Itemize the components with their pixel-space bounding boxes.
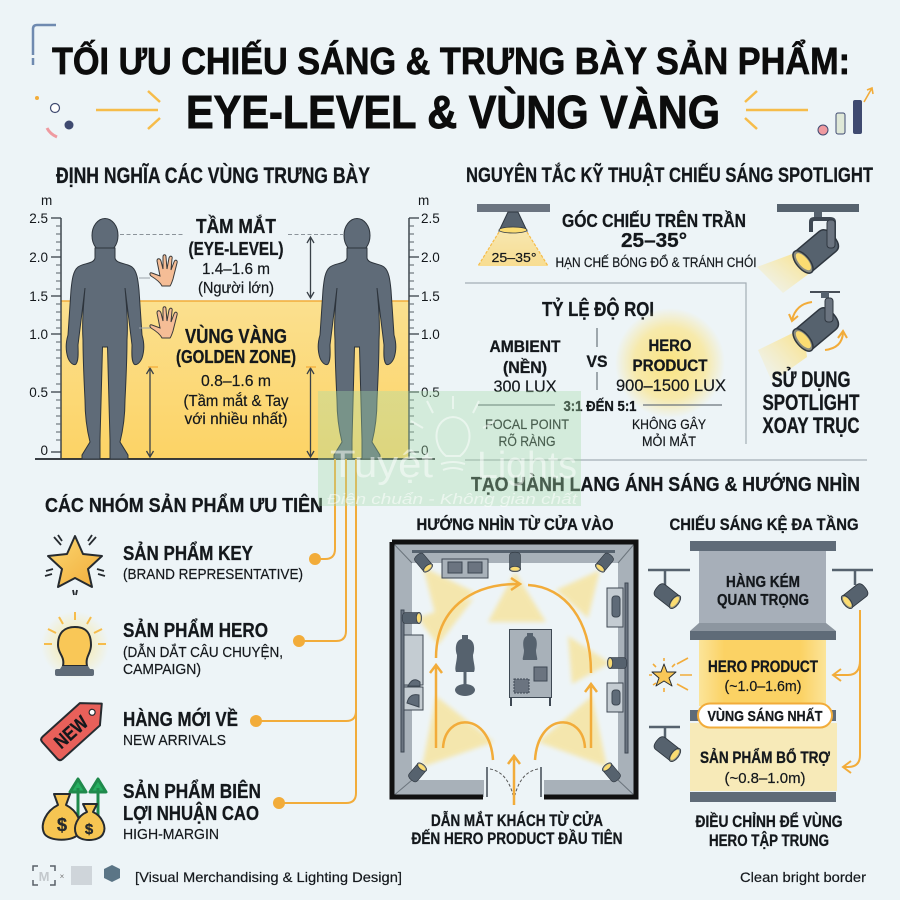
text: hero product: SẢN PHẨM HERO — [123, 619, 268, 642]
icon: shelf spotlight lower left — [649, 727, 683, 763]
text: rotating spotlight — [762, 367, 860, 438]
hero column: PRODUCT — [632, 356, 708, 375]
icon: track spotlight — [757, 204, 859, 293]
diagram: multi-tier shelf — [648, 541, 873, 802]
text: hero product — [123, 619, 283, 678]
eye-level guides — [120, 234, 343, 236]
footer logos — [33, 865, 120, 885]
diagram: store floor plan — [392, 542, 636, 805]
label: golden zone: 0.8–1.6 m — [201, 373, 271, 390]
text: hero product: (DẪN DẮT CÂU CHUYỆN, — [123, 643, 283, 661]
label: eye-level: (Người lớn) — [198, 280, 274, 297]
supporting tier — [690, 710, 837, 802]
text: high margin: SẢN PHẨM BIÊN — [123, 779, 261, 803]
icon: hero star — [649, 658, 692, 692]
hero tier: HERO PRODUCT — [708, 657, 818, 676]
label: golden zone: (GOLDEN ZONE) — [176, 347, 296, 367]
caption: shelf: ĐIỀU CHỈNH ĐỂ VÙNG — [696, 812, 842, 831]
text: key product: (BRAND REPRESENTATIVE) — [123, 566, 303, 583]
ambient column — [490, 337, 561, 396]
label: golden zone: (Tầm mắt & Tay — [184, 393, 289, 410]
text: high margin: LỢI NHUẬN CAO — [123, 801, 259, 825]
heading: priority groups: CÁC NHÓM SẢN PHẨM ƯU TIÊN — [45, 493, 323, 517]
figure left — [66, 218, 144, 459]
outcomes: RÕ RÀNG — [498, 433, 556, 449]
text: ceiling angle — [556, 210, 756, 270]
text: key product — [123, 542, 303, 583]
chart: height zones — [29, 193, 440, 459]
axis labels right: m — [418, 193, 429, 208]
axis labels left: 2.0 — [29, 250, 48, 265]
watermark: Tuyệt — [330, 444, 433, 486]
hero column — [616, 336, 726, 395]
connector lines — [250, 459, 356, 809]
footer logos: M — [39, 869, 49, 884]
footer logos: × — [60, 872, 65, 881]
text: new arrivals: HÀNG MỚI VỀ — [123, 707, 238, 731]
panel dividers — [465, 283, 867, 460]
hero tier: (~1.0–1.6m) — [724, 678, 802, 695]
axis labels right: 2.0 — [421, 250, 440, 265]
axis labels left: 2.5 — [29, 211, 48, 226]
icon: money bags: $ — [85, 821, 94, 838]
axis labels right: 0.5 — [421, 385, 440, 400]
axis labels left: 1.0 — [29, 327, 48, 342]
axis labels left: 1.5 — [29, 289, 48, 304]
display table — [510, 630, 552, 706]
arrows: shelf light direction — [833, 610, 860, 773]
icon: light bulb — [41, 611, 109, 679]
supporting tier: SẢN PHẨM BỔ TRỢ — [700, 748, 830, 767]
label: golden zone — [176, 324, 296, 428]
subheading: multi-tier shelf: CHIẾU SÁNG KỆ ĐA TẦNG — [670, 515, 858, 534]
shelves and fixtures — [401, 559, 628, 753]
icon: shelf spotlight top left — [648, 570, 690, 610]
axis labels right: 0 — [421, 443, 429, 458]
title — [52, 38, 850, 138]
icon: new tag — [40, 692, 112, 762]
walls — [392, 542, 636, 797]
top tier: HÀNG KÉM — [726, 572, 800, 591]
caption: shelf — [696, 812, 842, 850]
text: new arrivals — [123, 707, 238, 749]
axis labels left — [29, 193, 52, 458]
text: ceiling angle: GÓC CHIẾU TRÊN TRẦN — [562, 210, 746, 231]
top tier — [690, 541, 836, 640]
hero column: HERO — [648, 336, 692, 355]
icon: rotating spotlight — [758, 292, 847, 382]
golden zone band — [61, 301, 409, 459]
ambient column: AMBIENT — [490, 337, 561, 356]
text: ceiling angle: HẠN CHẾ BÓNG ĐỔ & TRÁNH CHÓI — [556, 255, 756, 270]
top tier: QUAN TRỌNG — [717, 592, 809, 609]
caption: store: DẪN MẮT KHÁCH TỪ CỬA — [431, 811, 603, 830]
icon: money bags — [43, 779, 106, 840]
caption: store: ĐẾN HERO PRODUCT ĐẦU TIÊN — [412, 829, 622, 848]
footer note: Clean bright border — [740, 869, 866, 885]
ambient column: 300 LUX — [494, 377, 556, 396]
subheading: view from entrance: HƯỚNG NHÌN TỪ CỬA VÀO — [416, 515, 614, 534]
versus — [586, 328, 608, 390]
outcomes: FOCAL POINT — [485, 416, 569, 432]
door — [487, 767, 541, 797]
range arrows — [146, 237, 316, 457]
heading: display zones: ĐỊNH NGHĨA CÁC VÙNG TRƯNG BÀY — [56, 163, 370, 188]
icon: money bags: $ — [57, 815, 67, 835]
icon: shelf spotlight top right — [832, 570, 873, 610]
axis labels left: 0.5 — [29, 385, 48, 400]
label: eye-level: TẦM MẮT — [196, 214, 276, 238]
hero glow — [615, 308, 725, 418]
outcomes — [485, 416, 707, 449]
text: key product: SẢN PHẨM KEY — [123, 542, 254, 565]
outcomes: MỎI MẮT — [642, 432, 696, 449]
versus: VS — [586, 352, 608, 371]
axis labels left: 0 — [40, 443, 48, 458]
icon: star — [45, 535, 105, 595]
axis labels left: m — [41, 193, 52, 208]
text: rotating spotlight: SỬ DỤNG — [772, 367, 850, 392]
hero tier — [699, 640, 826, 706]
text: new arrivals: NEW ARRIVALS — [123, 732, 226, 749]
supporting tier: (~0.8–1.0m) — [724, 770, 806, 787]
icon: new tag: NEW — [50, 712, 93, 753]
axis labels right: 1.0 — [421, 327, 440, 342]
pill: brightest zone — [698, 704, 832, 728]
axis labels right — [418, 193, 440, 458]
title: EYE-LEVEL & VÙNG VÀNG — [186, 86, 720, 138]
text: hero product: CAMPAIGN) — [123, 661, 201, 678]
label: golden zone: với nhiều nhất) — [184, 411, 288, 428]
hand icons — [139, 255, 177, 338]
mannequin — [455, 635, 475, 696]
panel: illuminance ratio — [478, 297, 726, 449]
label: eye-level: 1.4–1.6 m — [202, 261, 270, 278]
axis labels right: 2.5 — [421, 211, 440, 226]
text: high margin: HIGH-MARGIN — [123, 826, 219, 843]
label: eye-level — [188, 214, 284, 297]
icon: ceiling spotlight with beam: 25–35° — [492, 250, 536, 265]
text: rotating spotlight: SPOTLIGHT — [762, 390, 860, 415]
decoration: left dots and arrow — [35, 91, 160, 137]
text: ceiling angle: 25–35° — [621, 230, 687, 252]
ratio line: 3:1 ĐẾN 5:1 — [564, 398, 636, 415]
light beams — [418, 567, 610, 767]
walking path arrows — [430, 578, 597, 805]
heading: ratio: TỶ LỆ ĐỘ RỌI — [542, 297, 654, 321]
heading: light corridor: TẠO HÀNH LANG ÁNH SÁNG & HƯỚNG NHÌN — [471, 472, 860, 496]
axis labels right: 1.5 — [421, 289, 440, 304]
footer label: [Visual Merchandising & Lighting Design] — [135, 869, 402, 885]
text: high margin — [123, 779, 261, 843]
watermark — [318, 391, 581, 508]
outcomes: KHÔNG GÂY — [632, 416, 707, 432]
figure right — [318, 218, 396, 459]
hero column: 900–1500 LUX — [616, 376, 726, 395]
spotlights — [402, 551, 627, 784]
label: golden zone: VÙNG VÀNG — [185, 324, 287, 348]
decoration: right arrow and bar chart — [745, 88, 873, 135]
watermark: Lights — [477, 445, 577, 487]
ambient column: (NỀN) — [503, 358, 547, 377]
text: rotating spotlight: XOAY TRỤC — [762, 413, 860, 438]
pill: brightest zone: VÙNG SÁNG NHẤT — [708, 707, 823, 725]
decoration: corner bracket — [33, 25, 56, 65]
label: eye-level: (EYE-LEVEL) — [188, 239, 284, 259]
caption: shelf: HERO TẬP TRUNG — [709, 831, 829, 850]
watermark: Điện chuẩn - Không gian chất — [327, 491, 578, 508]
caption: store — [412, 811, 622, 848]
icon: ceiling spotlight with beam — [477, 204, 550, 266]
